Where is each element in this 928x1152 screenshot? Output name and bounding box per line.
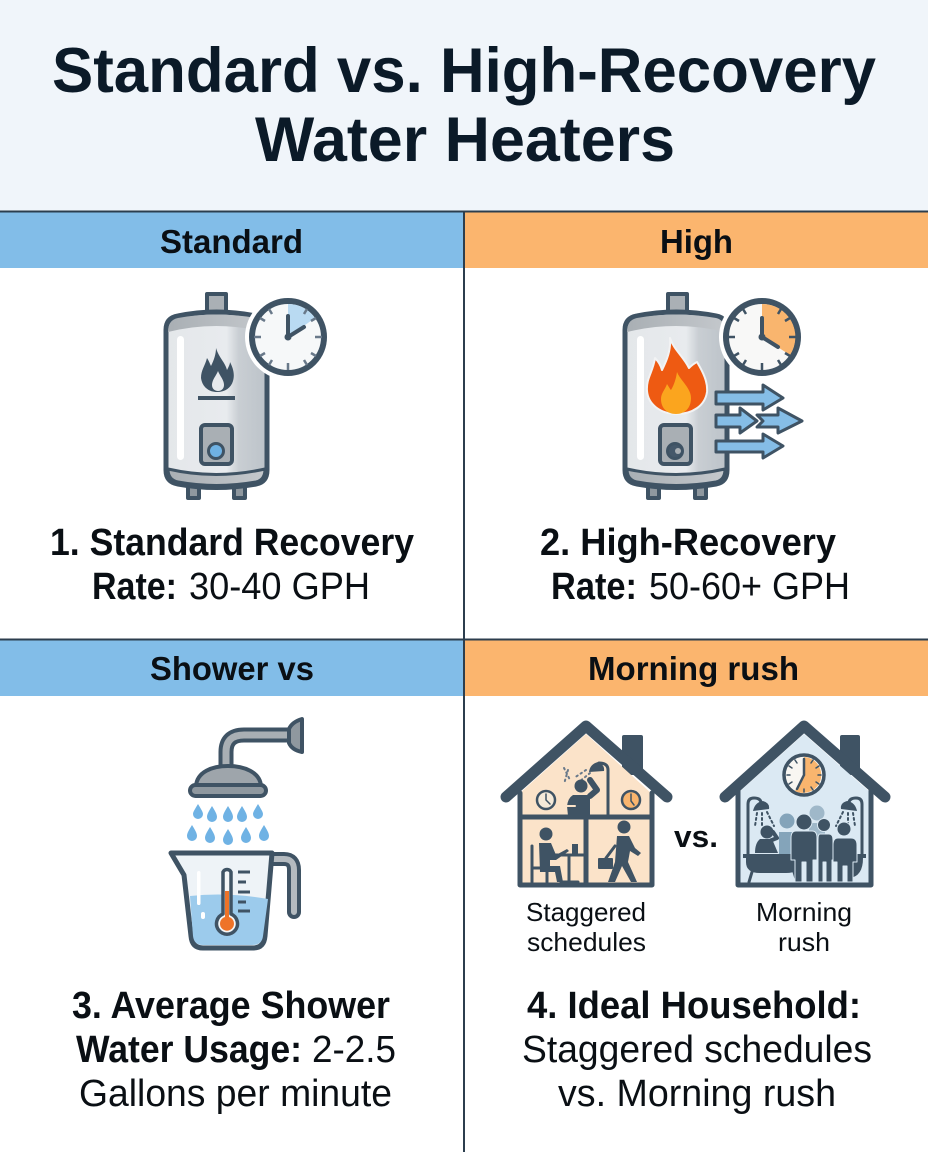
icon: high recovery water heater with flame, clock and arrows xyxy=(625,294,805,498)
text: ideal household xyxy=(522,985,872,1115)
header: Shower vs xyxy=(0,640,464,696)
text: high recovery rate xyxy=(540,522,850,608)
text: shower water usage: 2-2.5 xyxy=(312,1029,396,1071)
caption: staggered schedules xyxy=(526,897,646,957)
header: Morning rush: Morning rush xyxy=(588,650,799,687)
title band: Water Heaters xyxy=(255,105,675,175)
text: ideal household: 4. Ideal Household: xyxy=(527,985,861,1027)
header: Shower vs: Shower vs xyxy=(150,650,314,687)
panel: shower usage xyxy=(0,640,464,1115)
text: high recovery rate: 50-60+ GPH xyxy=(649,566,850,608)
caption: morning rush: rush xyxy=(778,927,830,957)
caption: morning rush: Morning xyxy=(756,897,852,927)
header: Standard xyxy=(0,212,464,268)
caption: staggered schedules: Staggered xyxy=(526,897,646,927)
label: vs.: vs. xyxy=(674,819,718,854)
text: shower water usage xyxy=(72,985,396,1115)
text: shower water usage: Gallons per minute xyxy=(79,1073,392,1115)
title band: Standard vs. High-Recovery xyxy=(52,36,876,106)
text: ideal household: Staggered schedules xyxy=(522,1029,872,1071)
text: standard recovery rate: 30-40 GPH xyxy=(189,566,370,608)
text: high recovery rate: 2. High-Recovery xyxy=(540,522,836,564)
icon: shower head over measuring jug with thermometer xyxy=(171,719,302,948)
text: shower water usage: Water Usage: xyxy=(76,1029,302,1071)
text: ideal household: vs. Morning rush xyxy=(558,1073,836,1115)
caption: staggered schedules: schedules xyxy=(527,927,646,957)
panel: ideal household xyxy=(465,640,928,1115)
icon: standard water heater with clock xyxy=(166,294,331,498)
header: High xyxy=(465,212,928,268)
icon: house with staggered schedules xyxy=(506,726,667,885)
text: standard recovery rate xyxy=(50,522,414,608)
title band xyxy=(0,0,928,211)
panel: high recovery xyxy=(465,212,928,608)
header: Morning rush xyxy=(465,640,928,696)
caption: morning rush xyxy=(756,897,852,957)
text: standard recovery rate: 1. Standard Recovery xyxy=(50,522,414,564)
text: standard recovery rate: Rate: xyxy=(92,566,177,608)
icon: house with morning rush xyxy=(725,726,885,885)
header: High: High xyxy=(660,223,733,260)
text: shower water usage: 3. Average Shower xyxy=(72,985,390,1027)
header: Standard: Standard xyxy=(160,223,303,260)
panel: standard recovery xyxy=(0,212,464,608)
text: high recovery rate: Rate: xyxy=(551,566,637,608)
